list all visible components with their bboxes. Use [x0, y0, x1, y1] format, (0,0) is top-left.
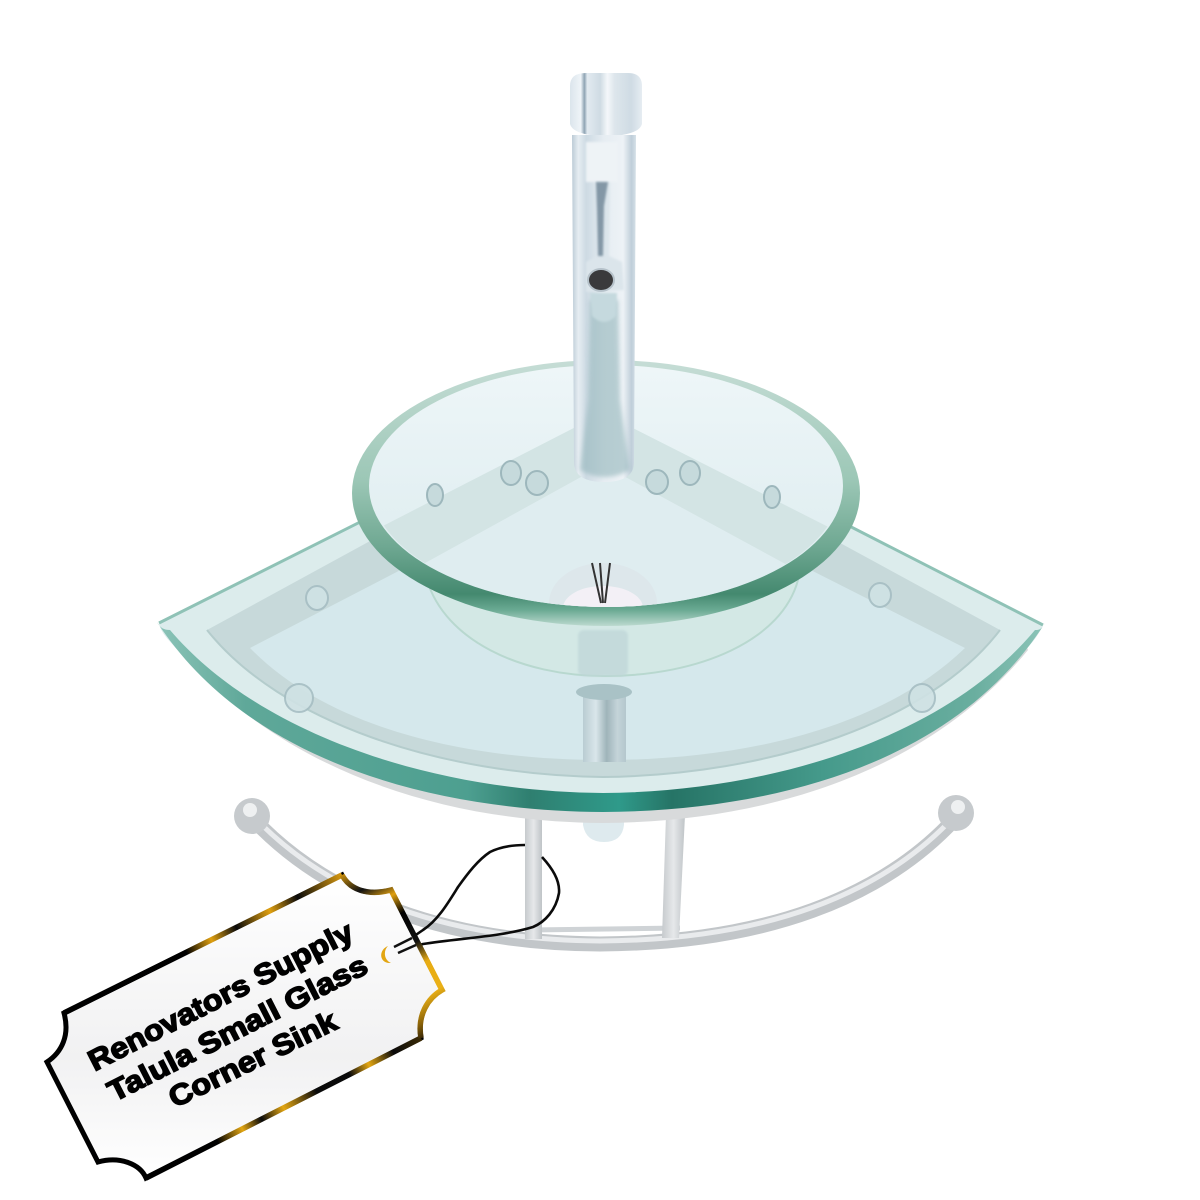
tag line 1: Renovators Supply [83, 916, 359, 1078]
glass shelf [157, 400, 1045, 812]
tag eyelet [381, 946, 391, 963]
tag right border [342, 875, 442, 1038]
tag line 2: Talula Small Glass [103, 950, 373, 1108]
rail end ball right [938, 795, 974, 831]
frame band through bowl [384, 428, 828, 564]
shelf bevel lines [207, 630, 1000, 777]
drain pipe below shelf [583, 815, 624, 842]
steel frame under shelf [182, 640, 1028, 823]
shelf metal frame band [207, 414, 1000, 777]
tag text [83, 916, 373, 1114]
tag bottom border [146, 1038, 421, 1178]
tag top border [64, 875, 342, 1013]
faucet base reflection [580, 300, 630, 477]
lower spout reflection [590, 293, 617, 322]
pane through bowl [496, 593, 716, 607]
faucet [570, 73, 642, 482]
tag string ends [394, 938, 416, 953]
bowl bolts [427, 461, 780, 508]
tag shape [47, 875, 442, 1178]
towel rail [234, 795, 974, 944]
string tie [394, 845, 559, 953]
bowl rim [352, 360, 860, 626]
shelf inner pane [250, 465, 965, 760]
support posts [525, 815, 685, 939]
shelf front edge strip [157, 622, 1045, 812]
shelf outline edge [159, 400, 1043, 625]
spout [586, 182, 624, 292]
tag line 3: Corner Sink [164, 1005, 343, 1114]
drain reflection [578, 630, 628, 676]
faucet light panel [586, 142, 618, 182]
glass bowl [340, 360, 870, 676]
product tag [47, 875, 442, 1178]
drain dome [550, 604, 657, 607]
bowl lower body [427, 580, 798, 676]
infographic: glass corner sink product photo [44, 73, 1044, 1182]
aerator [588, 269, 614, 291]
shelf bolts [285, 583, 935, 712]
faucet cap [570, 73, 642, 135]
bowl interior [369, 365, 843, 607]
faucet body [572, 135, 636, 482]
pipe seen through shelf [576, 684, 632, 762]
rail end ball left [234, 798, 270, 834]
shelf top surface [159, 400, 1043, 810]
